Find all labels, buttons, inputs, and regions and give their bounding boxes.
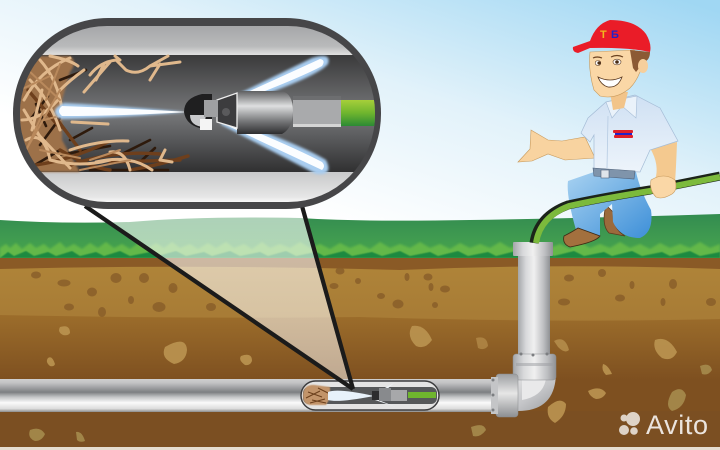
large stones lower soil xyxy=(29,326,712,442)
far leg shoe xyxy=(604,205,625,236)
left arm and hand xyxy=(518,130,595,162)
small stones upper soil xyxy=(31,268,716,317)
right arm xyxy=(650,142,677,182)
pipe interior xyxy=(14,55,384,172)
smile xyxy=(598,77,622,87)
sky background xyxy=(0,0,720,262)
vertical riser pipe with cap and elbow xyxy=(491,242,556,417)
worker figure xyxy=(518,20,720,247)
shirt xyxy=(581,95,678,172)
shoe xyxy=(564,228,600,247)
pipe wall top xyxy=(42,26,353,55)
pipe wall bottom xyxy=(42,172,354,202)
ear xyxy=(638,59,648,73)
hose from pipe to hand xyxy=(534,176,720,243)
Avito watermark: Avito xyxy=(646,410,708,440)
nozzle coupling xyxy=(293,100,341,124)
light beam from pipe to callout xyxy=(85,208,352,388)
belt xyxy=(593,168,635,179)
Avito watermark xyxy=(619,410,708,440)
nozzle body xyxy=(237,91,293,134)
cap letters: T xyxy=(600,29,607,41)
hair xyxy=(630,50,650,72)
grass band xyxy=(0,214,720,260)
eyes and brows xyxy=(593,56,623,66)
pointer lines to callout xyxy=(85,206,353,389)
face xyxy=(590,50,643,97)
shirt logo xyxy=(613,130,633,138)
water jets xyxy=(55,56,329,174)
nozzle head xyxy=(184,94,212,129)
cap xyxy=(573,20,650,53)
gripping hand xyxy=(651,176,676,198)
elbow xyxy=(500,372,556,411)
jeans xyxy=(568,172,652,238)
worker figure: Б xyxy=(611,29,619,41)
small pipe cutaway view xyxy=(301,381,439,410)
neck xyxy=(610,92,628,110)
hose inside pipe xyxy=(341,100,375,126)
horizontal sewer pipe xyxy=(0,379,500,412)
soil layers xyxy=(0,258,720,450)
root blockage xyxy=(18,56,188,172)
magnified pipe callout xyxy=(13,18,384,209)
